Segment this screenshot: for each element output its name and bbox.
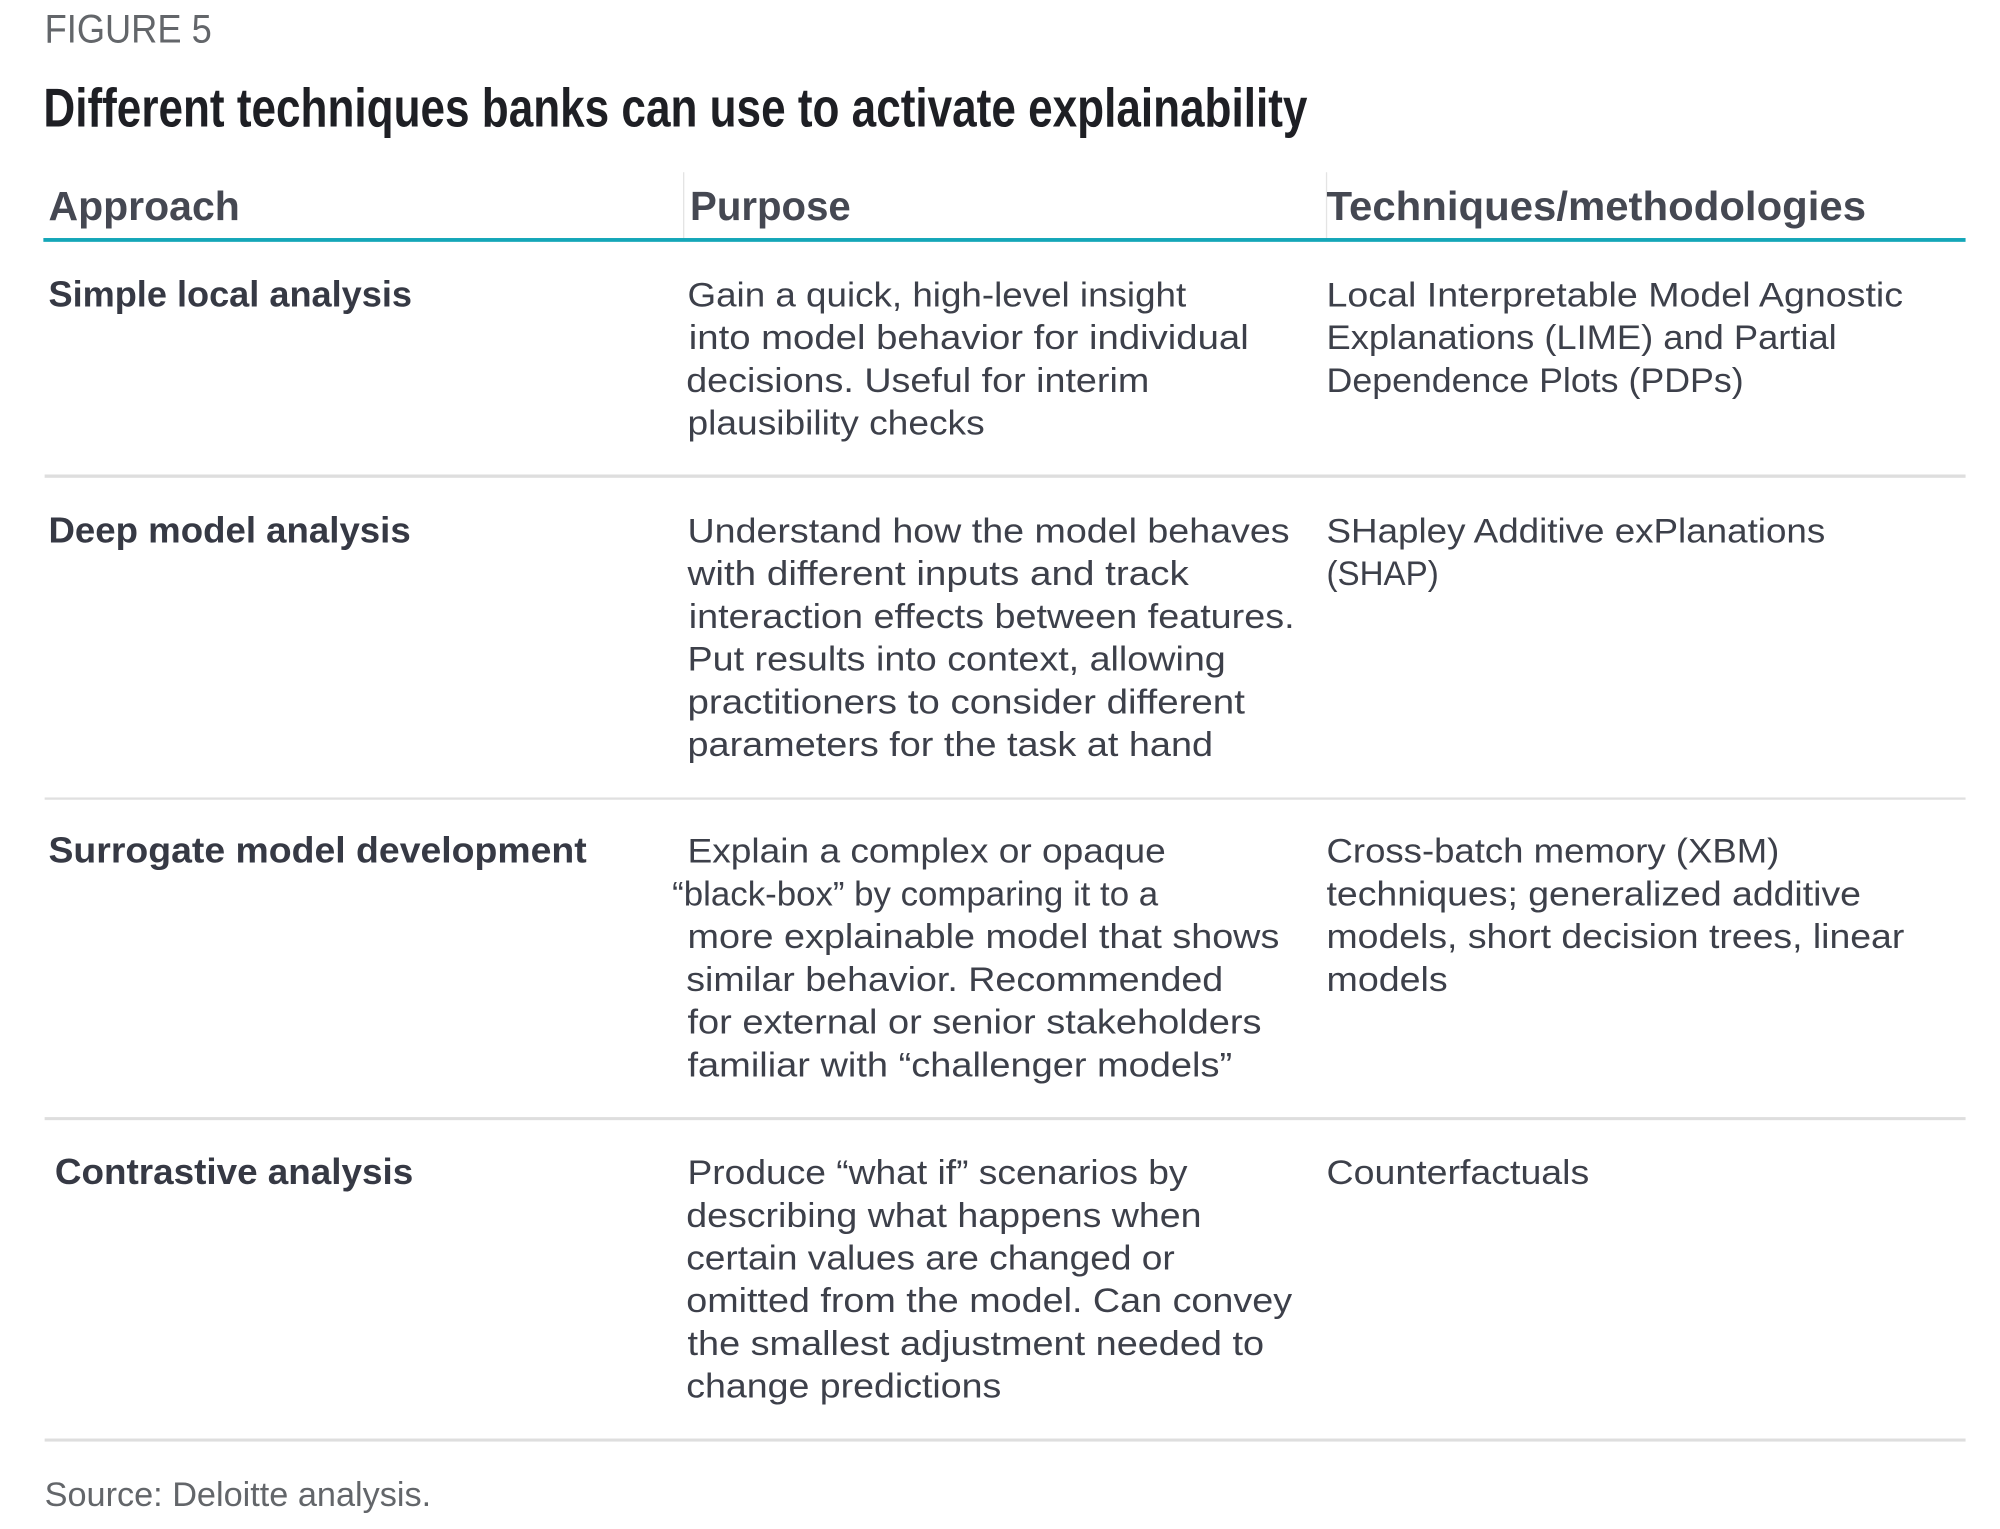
figure label: FIGURE 5 xyxy=(45,8,212,52)
purpose text: with different inputs and track xyxy=(686,555,1190,593)
techniques text: models, short decision trees, linear xyxy=(1327,918,1904,956)
purpose text: omitted from the model. Can convey xyxy=(686,1282,1293,1320)
row: contrastive analysis xyxy=(55,1152,1589,1406)
techniques text: techniques; generalized additive xyxy=(1327,875,1861,913)
row: surrogate model development xyxy=(48,831,1904,1084)
purpose text: decisions. Useful for interim xyxy=(686,362,1149,400)
purpose text xyxy=(686,512,1295,764)
purpose text: similar behavior. Recommended xyxy=(686,961,1223,999)
purpose text: describing what happens when xyxy=(686,1197,1202,1235)
purpose text: interaction effects between features. xyxy=(689,598,1295,636)
techniques text xyxy=(1327,512,1825,593)
source note: Source: Deloitte analysis. xyxy=(45,1476,431,1514)
approach name: Simple local analysis xyxy=(48,275,412,315)
techniques text: models xyxy=(1327,961,1448,999)
title: Different techniques banks can use to activate explainability xyxy=(43,77,1308,139)
purpose text: Gain a quick, high-level insight xyxy=(688,277,1187,315)
purpose text xyxy=(686,277,1249,443)
purpose text: plausibility checks xyxy=(688,405,985,443)
purpose text: “black-box” by comparing it to a xyxy=(672,875,1159,913)
purpose text: parameters for the task at hand xyxy=(688,726,1213,764)
purpose text: Explain a complex or opaque xyxy=(688,833,1166,871)
techniques text xyxy=(1327,277,1903,400)
row: simple local analysis xyxy=(48,275,1903,443)
techniques text: Explanations (LIME) and Partial xyxy=(1327,319,1837,357)
table header row xyxy=(48,172,1866,240)
techniques text: (SHAP) xyxy=(1327,555,1439,593)
purpose text xyxy=(686,1154,1293,1406)
purpose text: practitioners to consider different xyxy=(688,683,1245,721)
column heading: purpose: Purpose xyxy=(690,183,851,229)
purpose text: change predictions xyxy=(686,1368,1001,1406)
purpose text: familiar with “challenger models” xyxy=(688,1046,1232,1084)
purpose text: the smallest adjustment needed to xyxy=(688,1325,1264,1363)
techniques text: Counterfactuals xyxy=(1327,1154,1589,1192)
column heading: approach: Approach xyxy=(48,183,240,229)
column heading: techniques: Techniques/methodologies xyxy=(1327,183,1866,229)
approach name: Surrogate model development xyxy=(48,831,587,871)
purpose text: Produce “what if” scenarios by xyxy=(688,1154,1188,1192)
techniques text: Cross-batch memory (XBM) xyxy=(1327,833,1779,871)
purpose text: for external or senior stakeholders xyxy=(688,1004,1261,1042)
purpose text: Understand how the model behaves xyxy=(688,512,1290,550)
purpose text: more explainable model that shows xyxy=(688,918,1279,956)
purpose text xyxy=(672,833,1279,1084)
approach name: Deep model analysis xyxy=(48,510,411,550)
row: deep model analysis xyxy=(48,510,1825,764)
techniques text: SHapley Additive exPlanations xyxy=(1327,512,1825,550)
purpose text: into model behavior for individual xyxy=(689,319,1249,357)
purpose text: Put results into context, allowing xyxy=(688,641,1226,679)
techniques text: Local Interpretable Model Agnostic xyxy=(1327,277,1903,315)
techniques text: Dependence Plots (PDPs) xyxy=(1327,362,1744,400)
techniques text xyxy=(1327,833,1904,999)
purpose text: certain values are changed or xyxy=(686,1240,1175,1278)
approach name: Contrastive analysis xyxy=(55,1152,413,1192)
